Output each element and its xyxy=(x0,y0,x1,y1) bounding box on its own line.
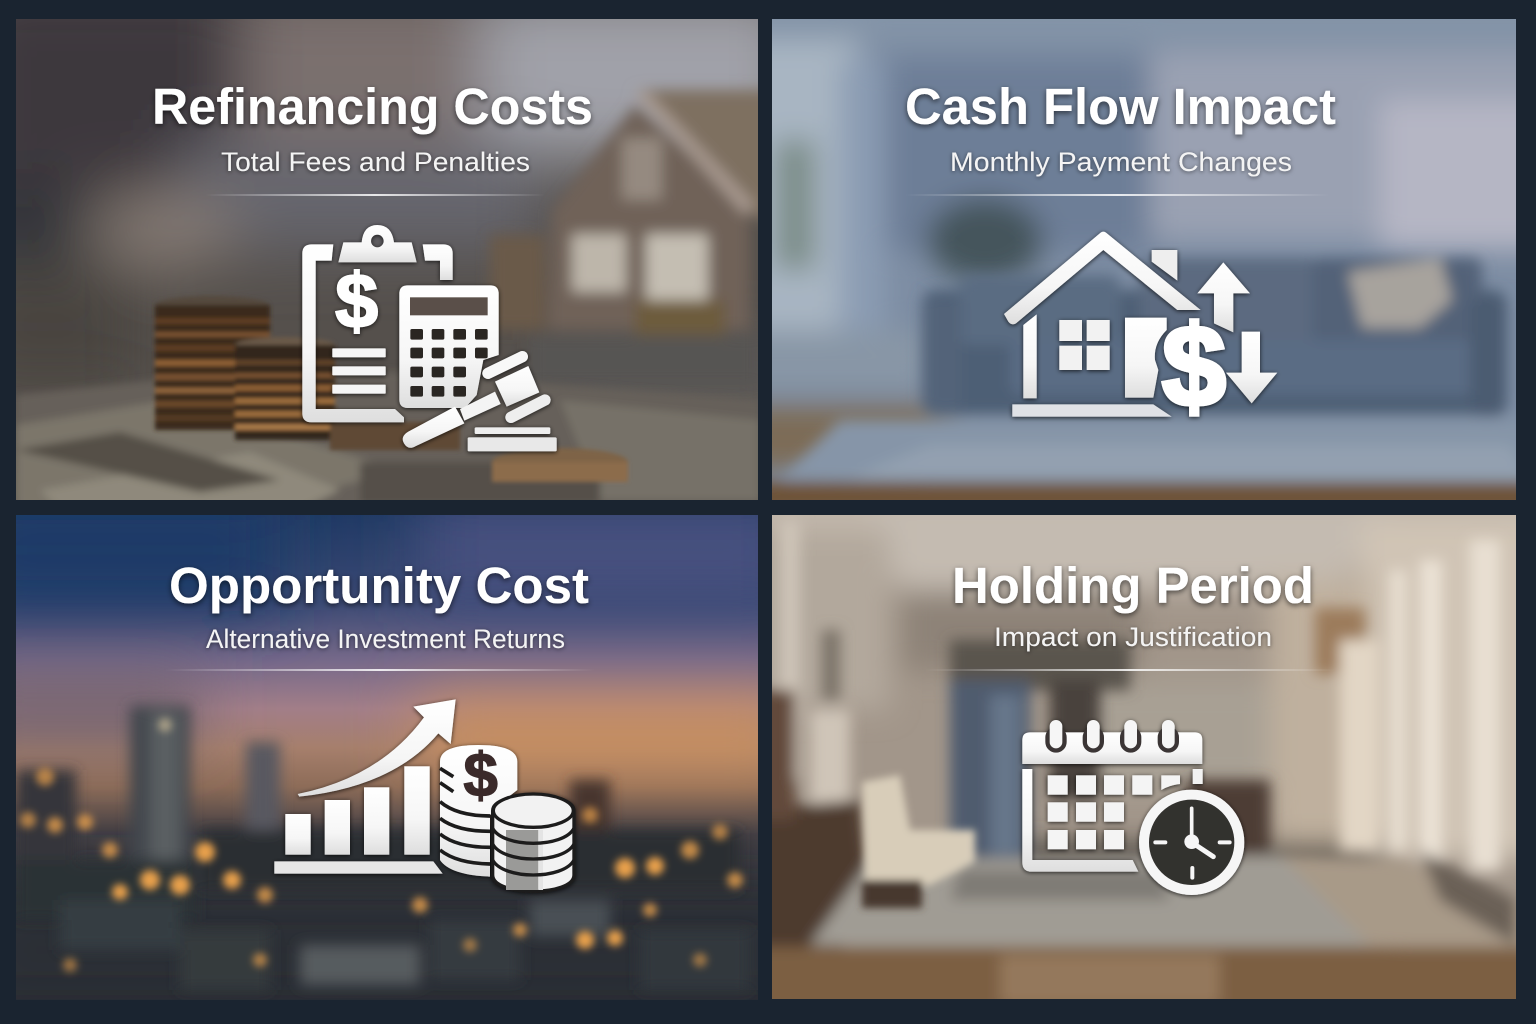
icon: bar chart with arrow and coin stacks xyxy=(274,699,574,891)
photo background: city skyline at dusk xyxy=(16,515,758,1000)
subheading: alternative investment returns: Alternative Investment Returns xyxy=(206,624,565,654)
subheading: total fees and penalties: Total Fees and Penalties xyxy=(221,147,530,177)
icon: clipboard, calculator and gavel xyxy=(302,225,557,451)
subheading: impact on justification: Impact on Justification xyxy=(994,622,1272,652)
divider line xyxy=(205,194,545,196)
heading: holding period: Holding Period xyxy=(952,557,1314,614)
photo background: bright interior xyxy=(772,515,1516,999)
divider line xyxy=(905,194,1330,196)
subheading: monthly payment changes: Monthly Payment Changes xyxy=(950,147,1292,177)
panel: holding period xyxy=(772,515,1516,999)
divider line xyxy=(925,669,1335,671)
heading: opportunity cost: Opportunity Cost xyxy=(169,557,589,614)
heading: refinancing costs: Refinancing Costs xyxy=(152,78,593,135)
panel: opportunity cost xyxy=(16,515,758,1000)
icon: calendar with clock xyxy=(1022,720,1239,890)
photo background: blue living room xyxy=(772,19,1516,500)
panel: cash flow impact xyxy=(772,19,1516,500)
icon: clipboard, calculator and gavel: $ xyxy=(335,258,378,344)
divider line xyxy=(165,669,595,671)
icon: house with dollar and arrows xyxy=(1004,232,1277,431)
icon: house with dollar and arrows: $ xyxy=(1162,303,1226,431)
icon: bar chart with arrow and coin stacks: $ xyxy=(463,742,498,811)
photo background: coins and house xyxy=(16,19,758,500)
heading: cash flow impact: Cash Flow Impact xyxy=(905,78,1336,135)
panel: refinancing costs xyxy=(16,19,758,500)
